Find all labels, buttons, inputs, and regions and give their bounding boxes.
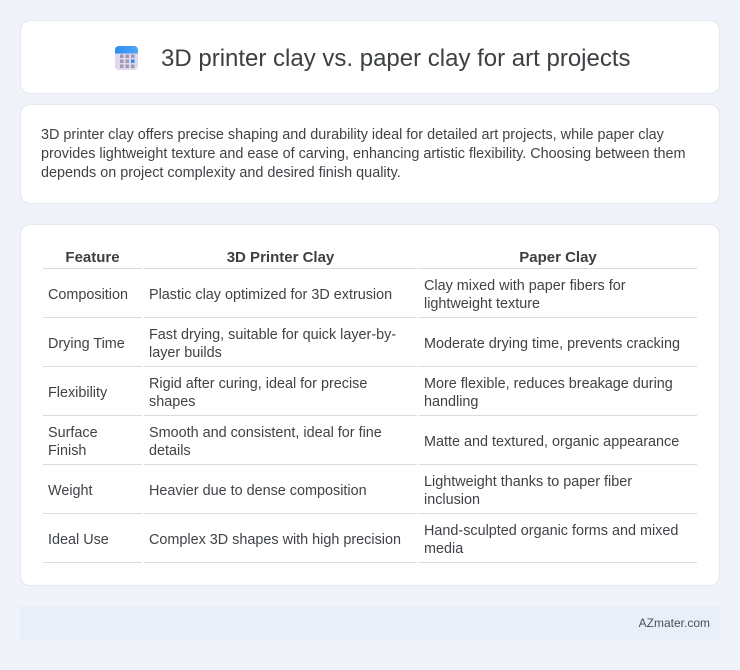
- row: surface finish: Smooth and consistent, ideal for fine: [149, 425, 382, 441]
- comparison table panel: [20, 224, 720, 586]
- row: weight: [48, 474, 632, 508]
- row: weight: inclusion: [424, 492, 480, 508]
- icon: calendar: [115, 46, 138, 70]
- row: flexibility: [48, 376, 673, 410]
- row: ideal use: Complex 3D shapes with high precision: [149, 532, 401, 548]
- row: flexibility: handling: [424, 394, 478, 410]
- row: surface finish: Surface: [48, 425, 98, 441]
- intro panel: [20, 104, 720, 204]
- title: 3D printer clay vs. paper clay for art projects: [161, 45, 631, 72]
- row: composition: Composition: [48, 287, 128, 303]
- table header: Feature: [65, 249, 120, 266]
- intro text: [41, 127, 685, 181]
- row: composition: lightweight texture: [424, 296, 540, 312]
- row: flexibility: Flexibility: [48, 385, 107, 401]
- row: surface finish: Matte and textured, organic appearance: [424, 434, 679, 450]
- row: weight: Lightweight thanks to paper fiber: [424, 474, 632, 490]
- row: ideal use: [48, 523, 678, 557]
- row: ideal use: Ideal Use: [48, 532, 109, 548]
- intro text: provides lightweight texture and ease of carving, enhancing artistic flexibility. Choosing between them: [41, 146, 685, 162]
- row: flexibility: shapes: [149, 394, 195, 410]
- intro text: depends on project complexity and desired finish quality.: [41, 165, 401, 181]
- row: weight: Weight: [48, 483, 93, 499]
- table header: 3D Printer Clay: [227, 249, 334, 266]
- row: ideal use: Hand-sculpted organic forms and mixed: [424, 523, 678, 539]
- row: weight: Heavier due to dense composition: [149, 483, 367, 499]
- intro text: 3D printer clay offers precise shaping and durability ideal for detailed art projects, while paper clay: [41, 127, 664, 143]
- row: ideal use: media: [424, 541, 463, 557]
- table header: Paper Clay: [519, 249, 597, 266]
- row: composition: Clay mixed with paper fibers for: [424, 278, 626, 294]
- table header: [65, 249, 597, 266]
- row: composition: [48, 278, 626, 312]
- row: drying time: [48, 327, 680, 361]
- row: surface finish: Finish: [48, 443, 86, 459]
- header panel: [20, 20, 720, 94]
- row: drying time: Fast drying, suitable for quick layer-by-: [149, 327, 396, 343]
- row: surface finish: details: [149, 443, 191, 459]
- row: flexibility: More flexible, reduces breakage during: [424, 376, 673, 392]
- row: drying time: Moderate drying time, prevents cracking: [424, 336, 680, 352]
- row: drying time: Drying Time: [48, 336, 125, 352]
- row: drying time: layer builds: [149, 345, 222, 361]
- footer credit: AZmater.com: [639, 616, 710, 630]
- footer bar: [20, 606, 720, 640]
- row: surface finish: [48, 425, 679, 459]
- row: composition: Plastic clay optimized for 3D extrusion: [149, 287, 392, 303]
- row: flexibility: Rigid after curing, ideal for precise: [149, 376, 367, 392]
